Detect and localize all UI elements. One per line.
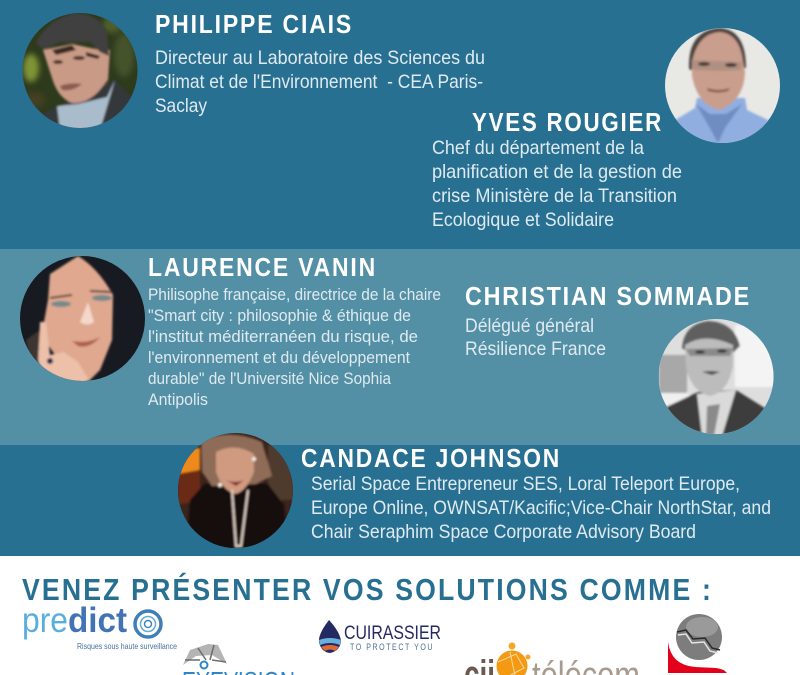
text: Yves Rougier role: Chef du département de la	[432, 137, 644, 159]
logo: predict: Risques sous haute surveillance	[77, 641, 177, 651]
panel: middle band	[0, 249, 800, 445]
text: Laurence Vanin role: durable" de l'Université Nice Sophia	[148, 369, 391, 388]
text: Laurence Vanin role: l'institut méditerranéen du risque, de	[148, 327, 418, 346]
name: Yves Rougier: YVES ROUGIER	[472, 109, 663, 137]
text: Christian Sommade role	[465, 315, 606, 360]
portrait: Candace Johnson	[178, 433, 294, 552]
text: Yves Rougier role: crise Ministère de la Transition	[432, 185, 677, 207]
text: Laurence Vanin role: "Smart city : philosophie & éthique de	[148, 306, 411, 325]
logo: predict: pre	[22, 601, 68, 640]
panel: top band	[0, 0, 800, 249]
text: Candace Johnson role: Serial Space Entrepreneur SES, Loral Teleport Europe,	[311, 473, 740, 495]
text: Laurence Vanin role: Philisophe française, directrice de la chaire	[148, 285, 441, 304]
text: Philippe Ciais role: Climat et de l'Environnement - CEA Paris-	[155, 71, 483, 93]
text: Christian Sommade role: Résilience France	[465, 338, 606, 360]
portrait: Laurence Vanin	[20, 256, 146, 384]
name: Laurence Vanin: LAURENCE VANIN	[148, 254, 377, 282]
logo: Cuirassier	[319, 620, 441, 653]
portrait: Christian Sommade	[659, 319, 775, 436]
text: Christian Sommade role: Délégué général	[465, 315, 594, 337]
logo: predict	[22, 601, 177, 651]
logo: grey sphere and red swoosh	[668, 614, 727, 673]
name: Candace Johnson: CANDACE JOHNSON	[301, 445, 561, 473]
text: Philippe Ciais role	[155, 47, 485, 117]
text: Candace Johnson role: Chair Seraphim Space Corporate Advisory Board	[311, 521, 696, 543]
text: Candace Johnson role	[311, 473, 771, 543]
text: Yves Rougier role: Ecologique et Solidaire	[432, 209, 614, 231]
logo: predict: dict	[68, 601, 127, 640]
logo: Cuirassier: TO PROTECT YOU	[350, 642, 434, 652]
text: Philippe Ciais role: Saclay	[155, 95, 207, 117]
panel: lower band	[0, 445, 800, 556]
text: Yves Rougier role	[432, 137, 682, 231]
text: Laurence Vanin role: l'environnement et du développement	[148, 348, 410, 367]
logo: Eyevision	[182, 644, 295, 675]
text: Yves Rougier role: planification et de la gestion de	[432, 161, 682, 183]
logo: Cuirassier: CUIRASSIER	[344, 623, 441, 644]
text: Laurence Vanin role: Antipolis	[148, 390, 208, 409]
name: Philippe Ciais: PHILIPPE CIAIS	[155, 11, 353, 39]
logo: cii telecom	[464, 642, 640, 675]
text: Philippe Ciais role: Directeur au Laboratoire des Sciences du	[155, 47, 485, 69]
text: Laurence Vanin role	[148, 285, 441, 409]
portrait: Yves Rougier	[665, 28, 781, 146]
portrait: Philippe Ciais	[22, 13, 138, 130]
name: Christian Sommade: CHRISTIAN SOMMADE	[465, 283, 751, 311]
